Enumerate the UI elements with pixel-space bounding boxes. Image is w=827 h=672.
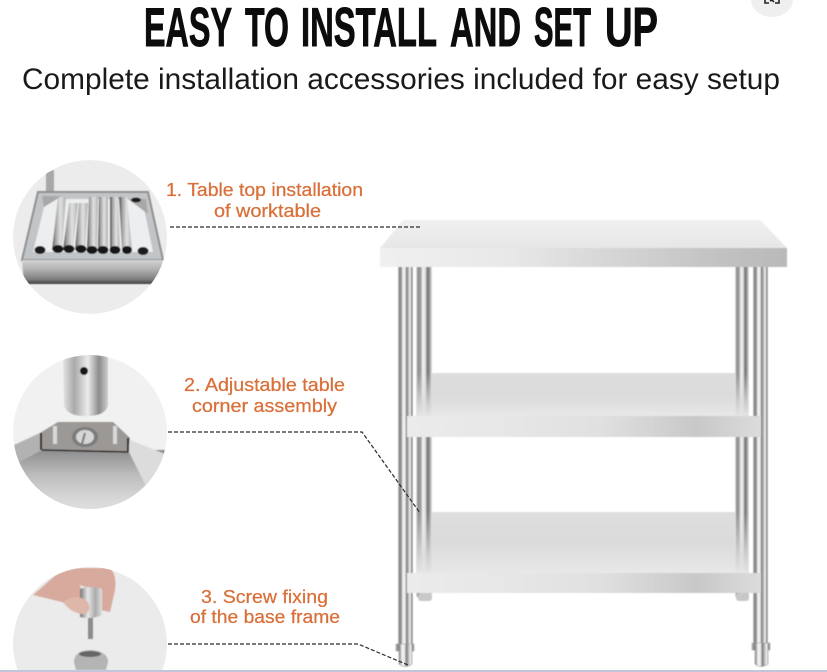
rear legs bbox=[416, 267, 749, 597]
label: step 2: 2. Adjustable table bbox=[184, 375, 345, 395]
left foot bbox=[396, 644, 414, 666]
leader line: step 3 bbox=[168, 644, 408, 665]
label: step 3: 3. Screw fixing bbox=[201, 587, 328, 607]
label: step 2: corner assembly bbox=[192, 396, 337, 416]
panel: step 1 photo, table top installation bbox=[13, 160, 167, 314]
label: step 1: of worktable bbox=[214, 201, 321, 221]
front right leg bbox=[753, 267, 768, 645]
steel shelf floor bbox=[19, 450, 165, 509]
bottom edge rule bbox=[0, 670, 827, 672]
product: stainless steel worktable bbox=[380, 220, 787, 666]
front edge of table top bbox=[22, 260, 163, 284]
table leg bbox=[63, 350, 108, 416]
table top front edge bbox=[380, 248, 787, 267]
tray inner bbox=[33, 199, 153, 252]
metal knob bbox=[80, 587, 102, 618]
lower shelf bbox=[407, 512, 761, 593]
middle shelf bbox=[407, 373, 761, 437]
thumb bbox=[63, 597, 89, 614]
screw bbox=[88, 615, 93, 639]
front left leg bbox=[398, 267, 413, 645]
base nut bbox=[74, 650, 108, 670]
label: step 1 bbox=[166, 180, 363, 221]
corner bracket bbox=[40, 422, 130, 452]
panel: step 3 photo, screw fixing bbox=[13, 567, 167, 670]
label: step 3: of the base frame bbox=[190, 607, 340, 627]
bolts bbox=[34, 246, 46, 254]
panel: step 2 photo, adjustable corner bbox=[13, 355, 167, 509]
leader line: step 2 bbox=[168, 432, 420, 513]
label: step 1: 1. Table top installation bbox=[166, 180, 363, 200]
leader line: step 1 bbox=[170, 226, 421, 228]
right foot bbox=[752, 643, 770, 666]
icon: image search button bbox=[751, 0, 793, 17]
title bbox=[144, 0, 658, 58]
icon: upright post bbox=[46, 170, 54, 195]
rear feet bbox=[418, 593, 749, 601]
tubes bbox=[52, 197, 132, 254]
table top surface bbox=[380, 220, 787, 248]
label: step 2 bbox=[184, 375, 345, 416]
subtitle: Complete installation accessories included for easy setup bbox=[22, 63, 780, 96]
table top underside bbox=[22, 192, 163, 260]
screw bbox=[72, 427, 98, 447]
corner brace bbox=[42, 196, 62, 207]
hand bbox=[33, 568, 115, 612]
left wall bbox=[14, 432, 41, 462]
label: step 3 bbox=[190, 587, 340, 627]
